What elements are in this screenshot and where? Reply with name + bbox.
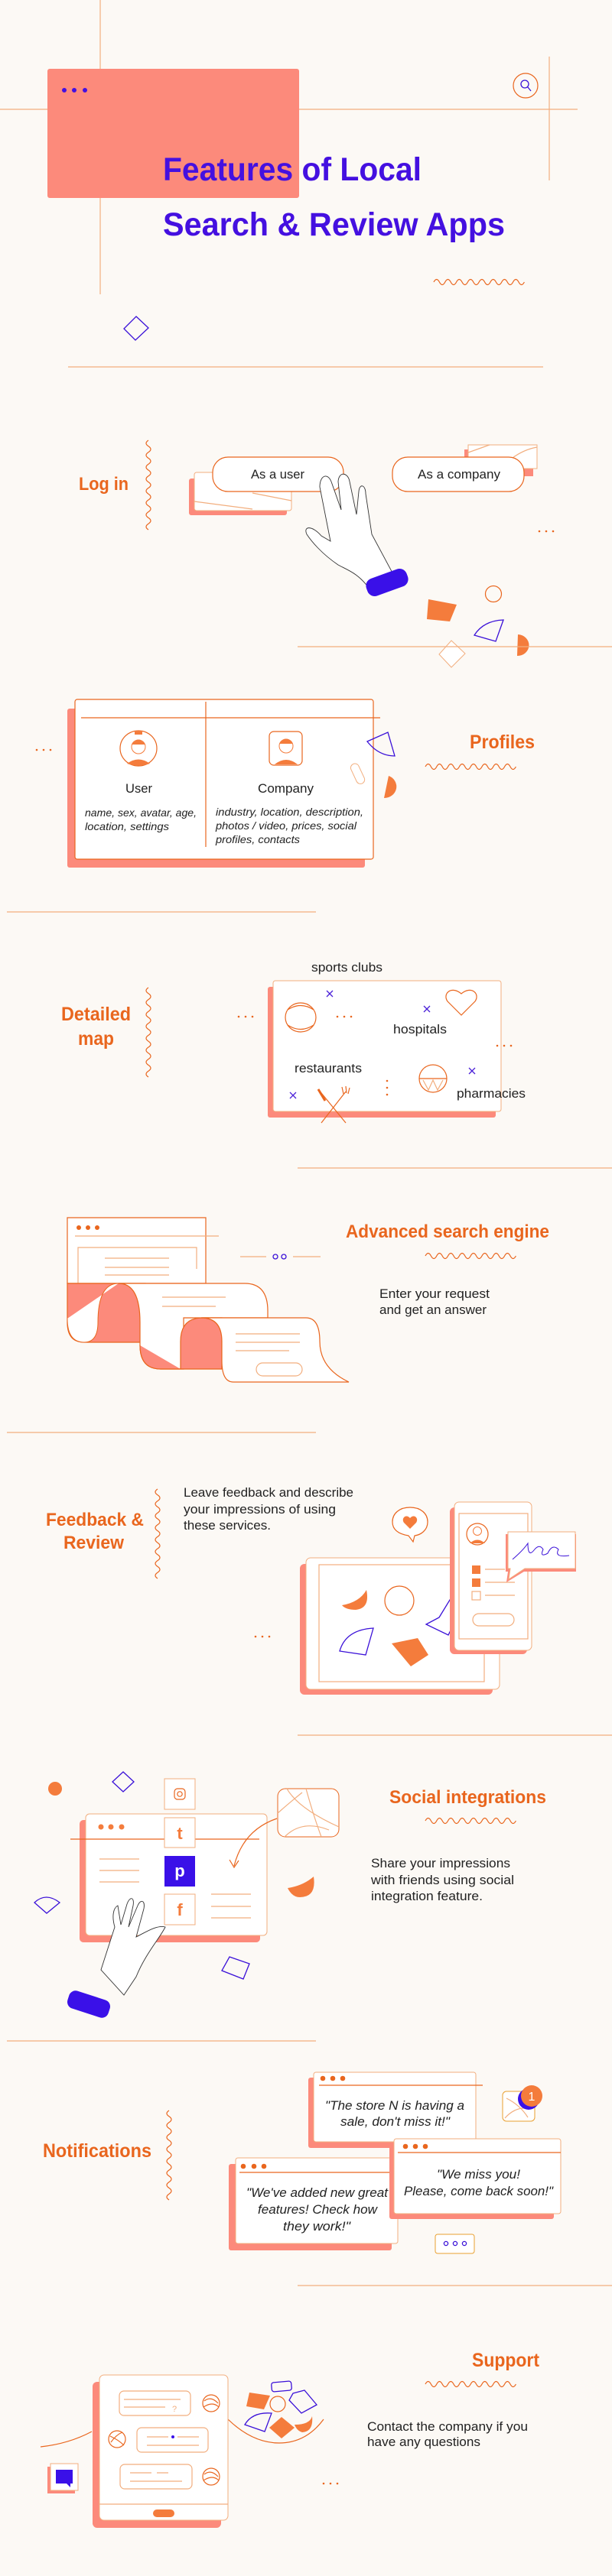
icon: facebook: f: [177, 1900, 183, 1919]
text: social: [370, 1856, 514, 1903]
shapes near profiles: [350, 732, 396, 798]
text: social: Share your impressions: [371, 1856, 510, 1870]
text: social: integration feature.: [371, 1889, 483, 1903]
panel: profiles card: User: [125, 781, 152, 796]
notification card 1: sale, don't miss it!": [340, 2114, 451, 2129]
panel: profiles card: location, settings: [85, 820, 169, 832]
heading: Advanced search engine: Advanced search engine: [346, 1221, 549, 1242]
text: social: with friends using social: [370, 1873, 514, 1887]
decorative dots: [539, 530, 554, 532]
icon: chat: [47, 2464, 78, 2493]
wave decoration: [434, 280, 524, 284]
panel: profiles card: Company: [258, 781, 314, 796]
icon: heart bubble: [392, 1507, 428, 1542]
text: support: have any questions: [367, 2435, 480, 2449]
heading: Feedback & Review: [46, 1510, 144, 1553]
icon: typing box: [435, 2234, 474, 2253]
heading: Detailed map: [61, 1004, 131, 1050]
icon: basketball: [419, 1065, 447, 1092]
button: as a user: As a user: [251, 467, 304, 482]
illustration: support phone: [41, 2375, 324, 2528]
heading: Detailed map: map: [78, 1028, 114, 1050]
panel: profiles card: profiles, contacts: [215, 833, 300, 845]
heading: Support: Support: [472, 2350, 540, 2371]
notification card 2: "We've added new great: [246, 2185, 389, 2200]
heading: Detailed map: Detailed: [61, 1004, 131, 1025]
button: as a user: [189, 457, 343, 515]
heading: Notifications: Notifications: [43, 2140, 151, 2162]
icon: diamond: [124, 316, 148, 340]
arrow: [230, 1818, 277, 1867]
illustration: social window: [34, 1772, 339, 2020]
notification card 3: Please, come back soon!": [404, 2184, 554, 2198]
heading: Profiles: Profiles: [470, 732, 535, 753]
illustration: tablet and phone: [300, 1502, 576, 1695]
icon: notification badge: 1: [529, 2091, 536, 2104]
notification card 1: [308, 2072, 483, 2148]
map panel: restaurants: [295, 1061, 362, 1075]
map panel: hospitals: [393, 1022, 447, 1037]
notification card 2: [229, 2158, 398, 2250]
text: feedback: Leave feedback and describe: [184, 1485, 353, 1500]
icon: facebook: [164, 1894, 195, 1925]
hero salmon window: [47, 69, 299, 198]
icon: pinterest: p: [174, 1861, 185, 1880]
connector: [240, 1254, 321, 1259]
heading: Log in: Log in: [79, 474, 129, 495]
text: feedback: your impressions of using: [184, 1502, 336, 1517]
shapes cluster: [427, 586, 529, 667]
vertical wave: [146, 440, 151, 530]
icon: search: [513, 73, 538, 98]
heading: Social integrations: Social integrations: [389, 1787, 546, 1808]
panel: profiles card: name, sex, avatar, age,: [85, 806, 197, 819]
title: Features of Local: [163, 151, 422, 188]
icon: fork and knife: [318, 1086, 350, 1123]
hand: tapping: [306, 474, 410, 599]
icon: tumblr: t: [177, 1824, 183, 1843]
icon: pinterest: [164, 1856, 195, 1887]
icon: instagram: [164, 1779, 195, 1809]
panel: profiles card: photos / video, prices, social: [215, 819, 357, 832]
shapes cluster: [245, 2381, 317, 2438]
map panel: pharmacies: [457, 1086, 526, 1101]
notification card 1: "The store N is having a: [325, 2098, 464, 2113]
map panel: [238, 960, 526, 1123]
icon: notification badge: [503, 2085, 542, 2121]
notification card 2: features! Check how: [258, 2202, 379, 2217]
heading: Feedback & Review: Feedback &: [46, 1510, 144, 1530]
text: search: and get an answer: [379, 1303, 487, 1317]
icon: user avatar: [120, 731, 157, 766]
button: as a company: [392, 445, 537, 492]
notification card 2: they work!": [283, 2219, 351, 2234]
illustration: support phone: ?: [172, 2405, 177, 2414]
text: search: Enter your request: [379, 1286, 490, 1301]
icon: ball: [285, 1003, 316, 1032]
icon: heart: [446, 990, 477, 1015]
icon: tumblr: [164, 1818, 195, 1848]
hand: [66, 1899, 165, 2020]
heading: Feedback & Review: Review: [63, 1533, 124, 1553]
illustration: search scroll: [67, 1218, 349, 1382]
text: feedback: these services.: [184, 1518, 271, 1533]
map card: [278, 1789, 339, 1837]
title: [163, 151, 505, 243]
panel: profiles card: [67, 699, 380, 868]
notification card 3: "We miss you!: [437, 2167, 520, 2182]
button: as a company: As a company: [418, 467, 500, 482]
text: search: [379, 1286, 490, 1317]
text: feedback: [184, 1485, 353, 1533]
panel: profiles card: industry, location, description,: [216, 806, 363, 818]
text: support: Contact the company if you: [367, 2419, 528, 2434]
title: Search & Review Apps: [163, 206, 505, 243]
notification card 3: [389, 2139, 561, 2219]
map panel: sports clubs: [311, 960, 382, 975]
icon: company avatar: [269, 732, 302, 765]
text: support: [367, 2419, 528, 2449]
